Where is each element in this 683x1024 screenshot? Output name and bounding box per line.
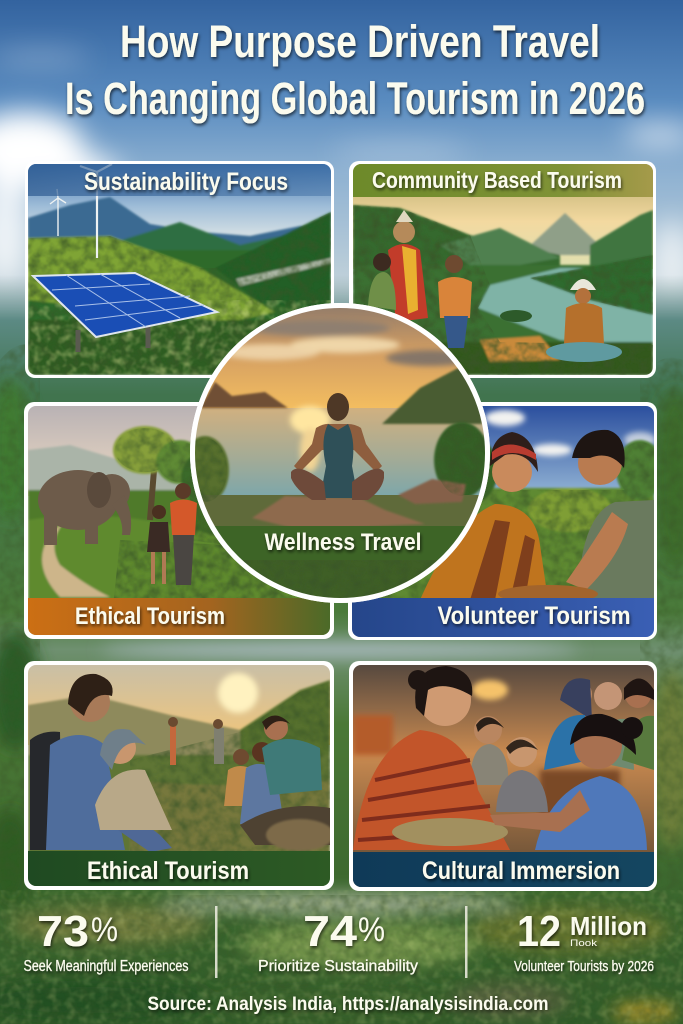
divider: left [215, 906, 218, 978]
stat: 12 Million: Million [570, 911, 647, 941]
label: Cultural Immersion [422, 857, 620, 885]
icon: solar panel [33, 273, 217, 352]
panel: Sustainability Focus [25, 161, 334, 378]
far bank texture [530, 255, 653, 315]
label: Wellness Travel [264, 529, 422, 556]
stat: 12 Million: Πook [570, 938, 598, 948]
food platter [498, 585, 598, 598]
figure: seated group [168, 715, 330, 845]
title [65, 16, 645, 124]
panel: Wellness Travel (central circle) [181, 303, 490, 605]
figure: woman in blue [490, 714, 647, 850]
label: Sustainability Focus [84, 168, 288, 196]
figure: woman in orange sari [353, 666, 510, 850]
banner [352, 598, 654, 637]
stat: 12 Million: 12 [517, 907, 561, 956]
trees [195, 422, 485, 495]
figure: meditating person [291, 393, 384, 500]
banner [28, 164, 331, 196]
panel: Community Based Tourism [349, 161, 656, 378]
stat: 73%: 73 [37, 907, 89, 956]
foliage texture [196, 438, 463, 502]
banner [353, 164, 653, 197]
stat: 73% [24, 907, 189, 975]
banner [353, 852, 654, 887]
banner [190, 526, 490, 560]
panel: Ethical Tourism (lower) [24, 661, 334, 890]
foliage texture [28, 212, 331, 375]
figure: seated person [546, 279, 622, 362]
stat: 73%: Seek Meaningful Experiences [24, 958, 189, 975]
panel: Ethical Tourism [24, 402, 334, 639]
panel: Volunteer Tourism [348, 402, 664, 640]
foliage texture [130, 682, 330, 855]
figure: villagers [368, 210, 472, 348]
stat: 74% [258, 907, 418, 975]
stat: 74%: % [358, 911, 385, 949]
figure: people [147, 483, 197, 585]
stat: 12 Million [514, 907, 654, 975]
icon: elephant [38, 470, 131, 545]
banner [28, 598, 330, 636]
highlights on bushes [28, 300, 331, 375]
label: Ethical Tourism [87, 857, 249, 885]
label: Ethical Tourism [75, 603, 225, 630]
figure: woman in patterned dress [420, 432, 548, 600]
figures: background villagers [470, 678, 654, 812]
rocks [252, 479, 466, 530]
label: Volunteer Tourism [438, 602, 630, 630]
icon: tree [112, 424, 192, 520]
stat: 74%: 74 [303, 907, 358, 956]
figure: woman with headscarf [95, 729, 172, 830]
mountains [200, 368, 482, 424]
foliage texture [114, 508, 292, 598]
label: Community Based Tourism [372, 167, 622, 193]
foliage texture [353, 205, 653, 375]
panel: Cultural Immersion [349, 661, 657, 891]
figure: man with backpack [30, 674, 172, 852]
stat: 74%: Prioritize Sustainability [258, 958, 418, 975]
figure: man in green shirt [566, 430, 654, 600]
banner [28, 851, 330, 886]
icon: wind turbines [50, 164, 112, 258]
divider: right [465, 906, 468, 978]
stat: 73%: % [91, 911, 118, 949]
foliage texture [380, 442, 654, 598]
source line: Source: Analysis India, https://analysisindia.com [148, 994, 548, 1015]
